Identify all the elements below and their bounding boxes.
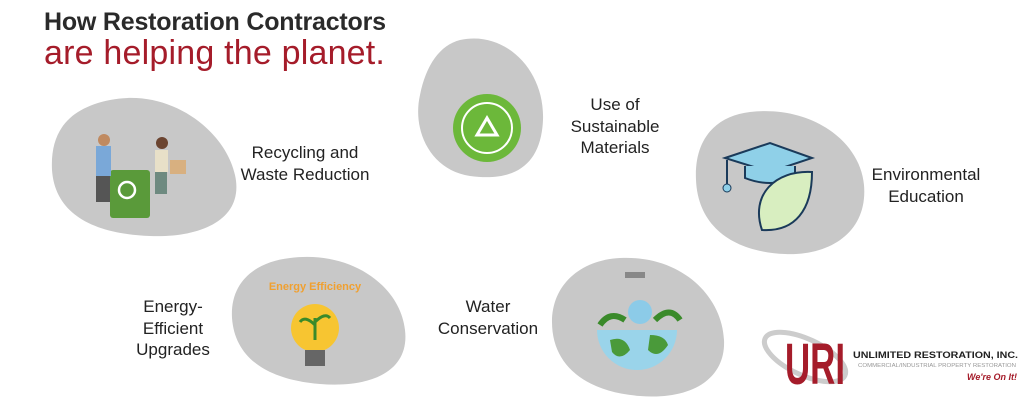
- label: energy: Energy-: [143, 297, 203, 316]
- label: recycling: Recycling and: [252, 143, 358, 162]
- icon: light bulb: [269, 281, 362, 366]
- label: water: Water: [466, 297, 510, 316]
- label: sustainable materials: Sustainable: [571, 116, 659, 136]
- blob: energy: [232, 257, 405, 385]
- label: energy: [136, 297, 210, 359]
- icon: sustainable badge: [453, 94, 521, 162]
- icon: earth with water: [597, 272, 680, 370]
- label: water: Conservation: [438, 318, 538, 338]
- label: environmental education: Environmental: [872, 165, 980, 184]
- title: [44, 8, 386, 72]
- label: recycling: Waste Reduction: [241, 164, 369, 184]
- label: water: [438, 297, 538, 338]
- logo: COMMERCIAL/INDUSTRIAL PROPERTY RESTORATION: [858, 363, 1016, 369]
- logo: [758, 322, 1018, 397]
- logo: UNLIMITED RESTORATION, INC.: [853, 350, 1018, 361]
- title: are helping the planet.: [44, 34, 385, 72]
- blob: education: [696, 111, 864, 254]
- blob: sustainable: [418, 38, 543, 177]
- label: energy: Upgrades: [136, 340, 210, 359]
- logo: URI: [785, 332, 845, 397]
- label: sustainable materials: [571, 95, 659, 157]
- label: environmental education: [872, 165, 980, 206]
- icon: people with recycling bin: [96, 134, 186, 218]
- blob: water: [552, 258, 724, 397]
- label: sustainable materials: Materials: [581, 138, 649, 157]
- title: How Restoration Contractors: [44, 8, 386, 36]
- blob: recycling: [52, 98, 236, 236]
- label: energy: Efficient: [143, 318, 203, 338]
- icon: light bulb: Energy Efficiency: [269, 281, 362, 293]
- logo: We're On It!: [967, 372, 1017, 382]
- label: recycling: [240, 143, 369, 184]
- label: environmental education: Education: [888, 186, 964, 206]
- label: sustainable materials: Use of: [590, 95, 640, 114]
- icon: graduation cap with leaf: [723, 143, 812, 230]
